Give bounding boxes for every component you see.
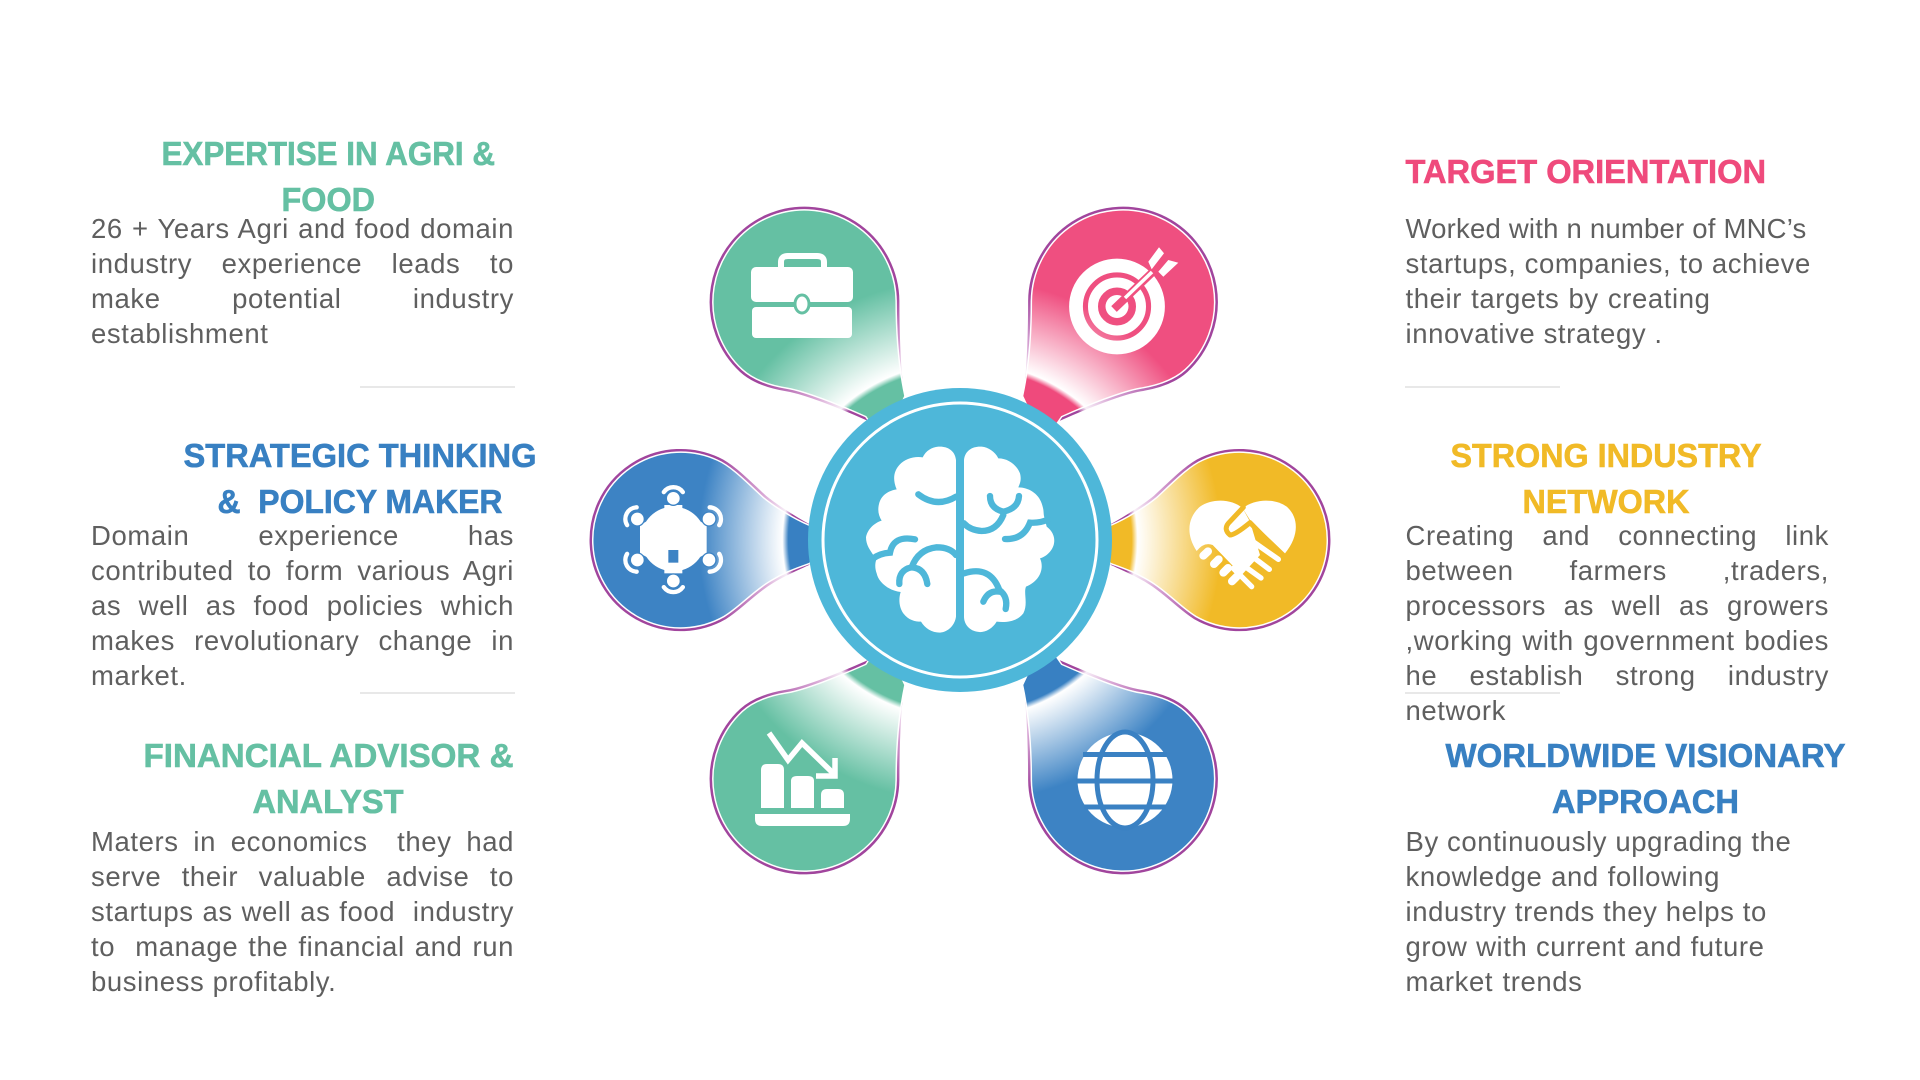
- icon: globe: [1076, 732, 1174, 828]
- heading: strong industry network: [1450, 437, 1762, 520]
- petal: financial (bottom left, green): [711, 639, 905, 873]
- text block: expertise: industry experience leads to: [91, 248, 514, 279]
- heading: strategic thinking & policy maker: & POLICY MAKER: [218, 483, 503, 520]
- text block: strategic: Domain experience has: [91, 520, 514, 551]
- petal: network (right, yellow): [1093, 450, 1329, 630]
- divider left 1: [360, 386, 515, 388]
- heading: financial advisor & analyst: ANALYST: [252, 783, 404, 820]
- text block: expertise: establishment: [91, 318, 268, 349]
- icon: briefcase: [751, 256, 853, 338]
- text block: strategic: market.: [91, 660, 187, 691]
- icon: brain: [866, 447, 1054, 633]
- text block: financial: business profitably.: [91, 966, 336, 997]
- text block: expertise: make potential industry: [91, 283, 514, 314]
- heading: strong industry network: NETWORK: [1522, 483, 1690, 520]
- heading: financial advisor & analyst: [144, 737, 514, 820]
- petal: expertise (top left, green): [711, 208, 905, 442]
- petal: worldwide (bottom right, blue): [1023, 639, 1216, 873]
- petal: target (top right, pink): [1023, 208, 1216, 442]
- icon: falling bar chart: [755, 733, 850, 826]
- text block: network: he establish strong industry: [1406, 660, 1829, 691]
- text block: target: innovative strategy .: [1406, 318, 1663, 349]
- text block: financial: [91, 826, 514, 997]
- text block: worldwide: [1406, 826, 1791, 997]
- text block: network: network: [1406, 695, 1506, 726]
- text block: financial: to manage the financial and run: [91, 931, 514, 962]
- text block: worldwide: market trends: [1406, 966, 1582, 997]
- heading: target orientation: TARGET ORIENTATION: [1406, 153, 1766, 190]
- divider right 2: [1405, 692, 1560, 694]
- petal: strategic (left, blue): [591, 450, 827, 630]
- text block: network: Creating and connecting link: [1406, 520, 1829, 551]
- divider right 1: [1405, 386, 1560, 388]
- central circle: [808, 388, 1112, 692]
- heading: worldwide visionary approach: [1446, 737, 1846, 820]
- icon: target with arrow: [1076, 247, 1178, 348]
- heading: expertise in agri & food: EXPERTISE IN AGRI &: [162, 135, 495, 172]
- text block: strategic: as well as food policies which: [91, 590, 514, 621]
- text block: expertise: 26 + Years Agri and food domain: [91, 213, 514, 244]
- text block: worldwide: grow with current and future: [1406, 931, 1764, 962]
- text block: network: ,working with government bodies: [1406, 625, 1829, 656]
- text block: financial: serve their valuable advise to: [91, 861, 514, 892]
- text block: worldwide: By continuously upgrading the: [1406, 826, 1791, 857]
- text block: network: between farmers ,traders,: [1406, 555, 1829, 586]
- heading: strategic thinking & policy maker: STRATEGIC THINKING: [184, 437, 536, 474]
- text block: target: their targets by creating: [1406, 283, 1710, 314]
- text block: target: startups, companies, to achieve: [1406, 248, 1811, 279]
- heading: worldwide visionary approach: APPROACH: [1552, 783, 1739, 820]
- text block: target: [1406, 213, 1811, 349]
- text block: strategic: makes revolutionary change in: [91, 625, 514, 656]
- heading: strong industry network: STRONG INDUSTRY: [1450, 437, 1762, 474]
- text block: network: processors as well as growers: [1406, 590, 1829, 621]
- icon: heart handshake: [1189, 501, 1296, 587]
- divider left 2: [360, 692, 515, 694]
- text block: expertise: [91, 213, 514, 349]
- text block: financial: Maters in economics they had: [91, 826, 514, 857]
- heading: expertise in agri & food: [162, 135, 495, 218]
- text block: strategic: [91, 520, 514, 691]
- icon: meeting table network: [625, 487, 721, 592]
- heading: expertise in agri & food: FOOD: [282, 181, 375, 218]
- text block: strategic: contributed to form various Agri: [91, 555, 514, 586]
- text block: financial: startups as well as food industry: [91, 896, 514, 927]
- heading: financial advisor & analyst: FINANCIAL ADVISOR &: [144, 737, 514, 774]
- text block: worldwide: industry trends they helps to: [1406, 896, 1767, 927]
- text block: target: Worked with n number of MNC’s: [1406, 213, 1806, 244]
- heading: strategic thinking & policy maker: [184, 437, 536, 520]
- text block: network: [1406, 520, 1829, 726]
- text block: worldwide: knowledge and following: [1406, 861, 1720, 892]
- heading: worldwide visionary approach: WORLDWIDE VISIONARY: [1446, 737, 1846, 774]
